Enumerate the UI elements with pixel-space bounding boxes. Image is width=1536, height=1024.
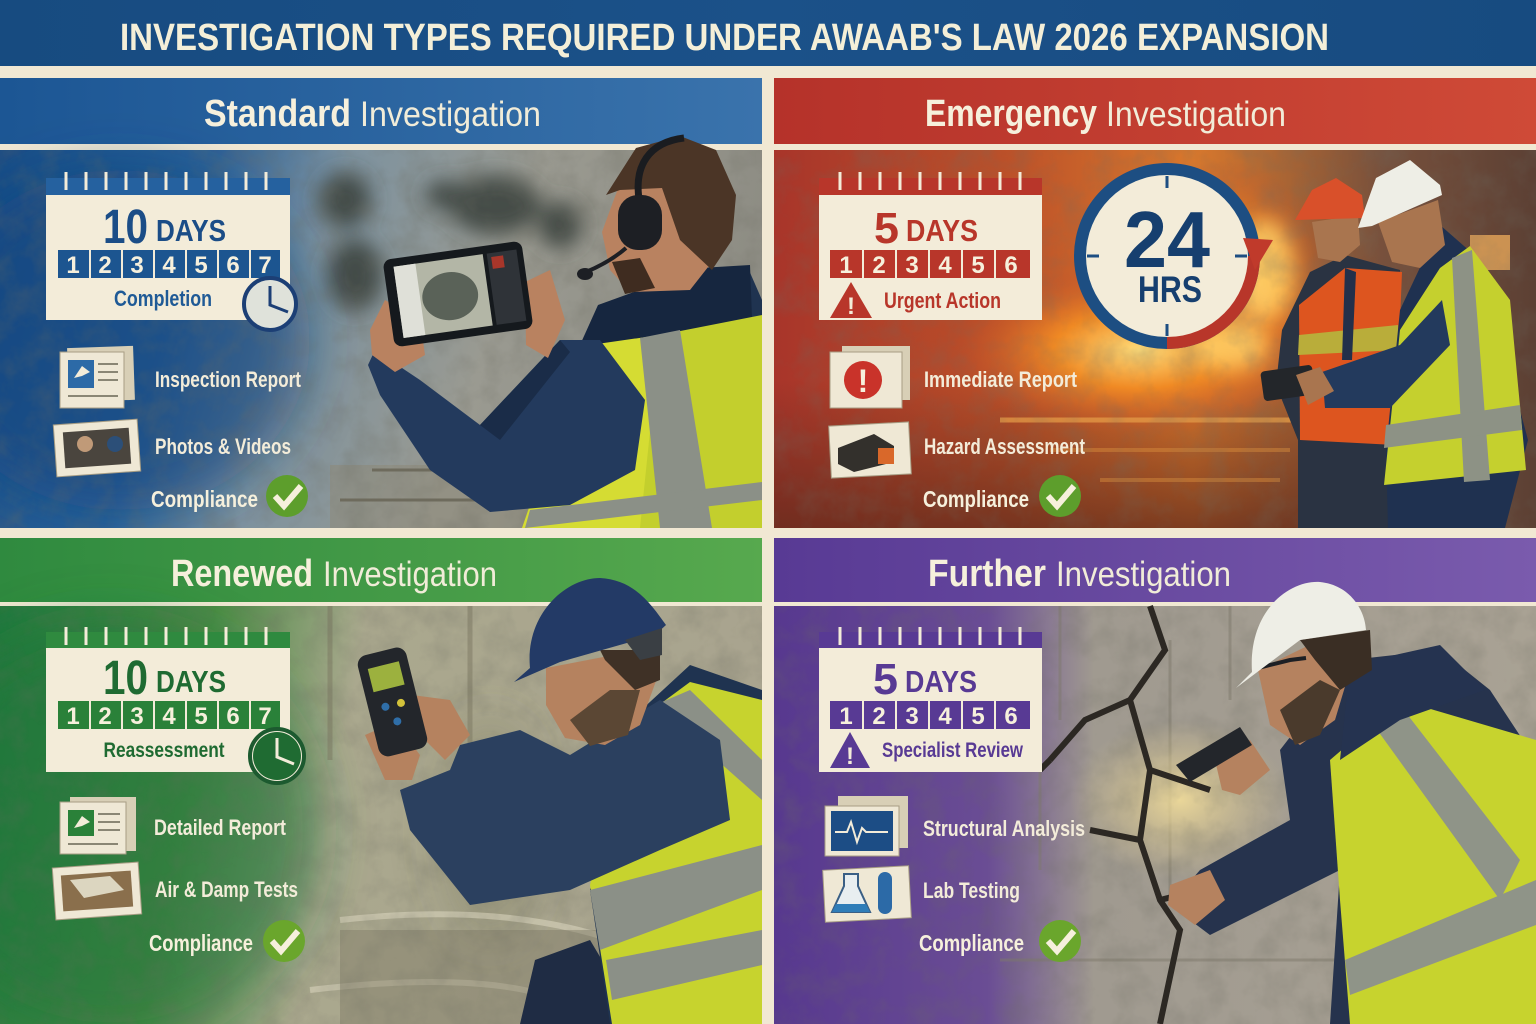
renewed scene: damp wall and inspector with meter — [0, 578, 762, 1024]
worker in yellow vest — [1260, 160, 1528, 528]
structural analysis item — [825, 796, 1085, 856]
calendar card: 5 days urgent action: 6 — [1004, 252, 1018, 279]
calendar card: 5 days urgent action: ! — [847, 293, 855, 320]
compliance check: Compliance — [151, 486, 258, 512]
tablet — [383, 241, 533, 347]
calendar card: 5 days specialist review: Specialist Review — [882, 739, 1024, 762]
compliance check — [919, 920, 1081, 962]
standard scene: mouldy wall and inspector with tablet — [0, 136, 762, 529]
emergency header: Emergency — [925, 93, 1097, 135]
calendar card: 10 days reassessment: 2 — [98, 703, 112, 730]
calendar card: 5 days specialist review: 5 — [873, 655, 898, 704]
calendar card: 5 days specialist review: DAYS — [905, 664, 977, 699]
air and damp tests item — [52, 862, 298, 920]
head — [1258, 635, 1350, 745]
calendar card: 10 days reassessment: 6 — [226, 703, 240, 730]
compliance check — [151, 475, 308, 517]
calendar card: 5 days urgent action: 5 — [971, 252, 985, 279]
calendar card: 10 days completion: 3 — [130, 252, 144, 279]
calendar card: 5 days specialist review: 6 — [1004, 703, 1018, 730]
calendar card: 10 days completion: 2 — [98, 252, 112, 279]
hands — [370, 300, 425, 372]
emergency scene: fire and two workers — [774, 150, 1536, 528]
hands and torch — [1215, 740, 1270, 795]
inspector — [368, 136, 762, 528]
photos and videos item — [53, 419, 291, 477]
calendar card: 10 days reassessment: 10 — [103, 652, 148, 705]
hands — [365, 731, 420, 780]
inspector — [356, 578, 762, 1024]
immediate report item — [830, 346, 1078, 408]
calendar card: 10 days completion: 1 — [66, 252, 80, 279]
calendar card: 10 days completion: 6 — [226, 252, 240, 279]
immediate report item: ! — [858, 363, 868, 399]
compliance check: Compliance — [149, 930, 253, 956]
calendar card: 10 days completion: 4 — [162, 252, 176, 279]
helmet — [514, 578, 666, 682]
head — [602, 188, 708, 292]
further header: Investigation — [1056, 555, 1231, 594]
calendar card: 10 days reassessment — [46, 627, 304, 783]
inspection report item — [60, 346, 302, 408]
calendar card: 10 days completion — [46, 172, 296, 330]
compliance check: Compliance — [923, 486, 1029, 512]
further scene: cracked wall and specialist with torch — [774, 582, 1536, 1024]
calendar card: 5 days specialist review: 1 — [839, 703, 853, 730]
air and damp tests item: Air & Damp Tests — [155, 877, 298, 902]
compliance check: Compliance — [919, 930, 1024, 956]
calendar card: 10 days completion: DAYS — [156, 213, 226, 248]
compliance check — [149, 920, 305, 962]
meter — [356, 645, 429, 758]
title banner — [0, 0, 1536, 66]
panel: standard investigation — [0, 78, 762, 529]
hazard assessment item: Hazard Assessment — [924, 434, 1086, 459]
specialist — [1168, 582, 1536, 1024]
structural analysis item: Structural Analysis — [923, 816, 1085, 841]
calendar card: 5 days specialist review — [819, 627, 1042, 772]
head — [546, 657, 656, 745]
calendar card: 10 days reassessment: 4 — [162, 703, 176, 730]
headset — [638, 138, 684, 205]
further header: Further — [928, 553, 1046, 595]
calendar card: 10 days reassessment: 1 — [66, 703, 80, 730]
helmet — [1236, 582, 1366, 688]
calendar card: 5 days urgent action — [819, 172, 1042, 320]
calendar card: 5 days urgent action: 4 — [938, 252, 952, 279]
calendar card: 5 days urgent action: 3 — [905, 252, 919, 279]
24 hrs clock — [1074, 163, 1273, 349]
calendar card: 10 days completion: 5 — [194, 252, 208, 279]
calendar card: 5 days specialist review: 3 — [905, 703, 919, 730]
panel: renewed investigation — [0, 538, 762, 1024]
calendar card: 5 days specialist review: 4 — [938, 703, 952, 730]
panel: further investigation — [774, 538, 1536, 1024]
calendar card: 5 days urgent action: DAYS — [906, 213, 978, 248]
immediate report item: Immediate Report — [924, 367, 1078, 392]
detailed report item — [60, 797, 287, 854]
calendar card: 5 days specialist review: 2 — [872, 703, 886, 730]
compliance check — [923, 475, 1081, 517]
inspection report item: Inspection Report — [155, 367, 302, 392]
calendar card: 10 days reassessment: Reassessment — [104, 739, 225, 762]
renewed header: Investigation — [323, 555, 497, 594]
calendar card: 10 days completion: Completion — [114, 286, 212, 311]
calendar card: 5 days urgent action: 5 — [874, 204, 899, 253]
calendar card: 10 days reassessment: DAYS — [156, 664, 226, 699]
renewed header: Renewed — [171, 553, 313, 595]
calendar card: 5 days urgent action: Urgent Action — [884, 288, 1001, 313]
calendar card: 5 days urgent action: 2 — [872, 252, 886, 279]
lab testing item: Lab Testing — [923, 878, 1020, 903]
emergency header: Investigation — [1106, 95, 1286, 134]
standard header — [0, 78, 762, 144]
calendar card: 10 days reassessment: 7 — [258, 703, 272, 730]
standard header: Investigation — [360, 95, 541, 134]
calendar card: 10 days completion: 10 — [103, 201, 148, 254]
calendar card: 10 days completion: 7 — [258, 252, 272, 279]
calendar card: 5 days specialist review: 5 — [971, 703, 985, 730]
24 hrs clock: HRS — [1138, 269, 1202, 310]
calendar card: 5 days specialist review: ! — [846, 743, 854, 770]
lab testing item — [823, 866, 1020, 922]
calendar card: 5 days urgent action: 1 — [839, 252, 853, 279]
calendar card: 10 days reassessment: 3 — [130, 703, 144, 730]
standard header: Standard — [204, 93, 351, 135]
further header — [774, 538, 1536, 602]
photos and videos item: Photos & Videos — [155, 434, 291, 459]
24 hrs clock: 24 — [1124, 195, 1210, 284]
detailed report item: Detailed Report — [154, 815, 287, 840]
title banner: INVESTIGATION TYPES REQUIRED UNDER AWAAB'S LAW 2026 EXPANSION — [120, 17, 1329, 59]
hazard assessment item — [829, 422, 1086, 478]
calendar card: 10 days reassessment: 5 — [194, 703, 208, 730]
emergency header — [774, 78, 1536, 144]
worker in orange vest — [1276, 178, 1402, 528]
panel: emergency investigation — [774, 78, 1536, 528]
renewed header — [0, 538, 762, 602]
